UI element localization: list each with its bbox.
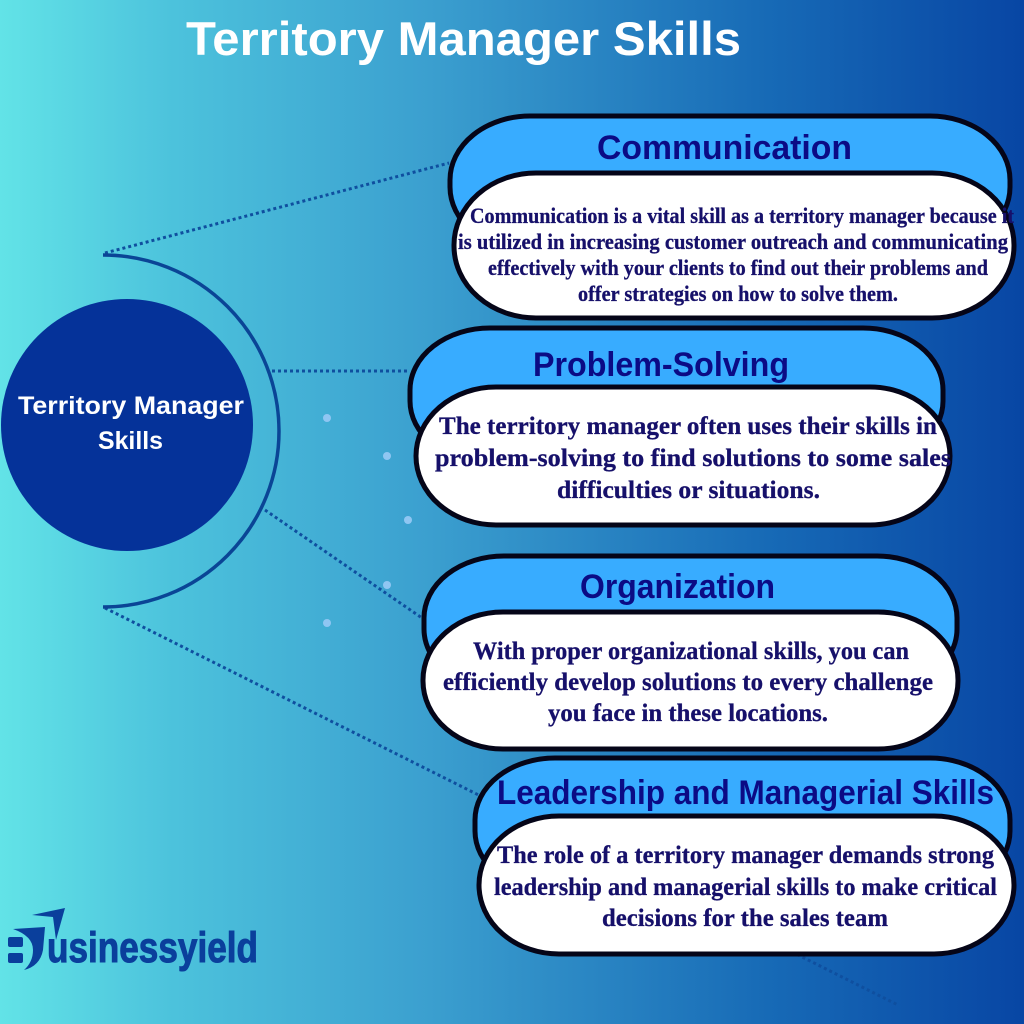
decorative arc around central circle (103, 255, 279, 607)
panel: Problem-Solving: problem-solving to find solutions to some sales (435, 445, 951, 472)
panel: Communication: Communication (597, 129, 852, 167)
panel: Leadership and Managerial Skills: decisions for the sales team (602, 905, 888, 932)
panel: Communication (450, 116, 1015, 318)
panel: Organization: With proper organizational skills, you can (473, 638, 909, 665)
panel: Problem-Solving: Problem-Solving (533, 346, 789, 384)
logo: Businessyield: usinessyield (47, 924, 258, 972)
panel: Leadership and Managerial Skills: leadership and managerial skills to make critical (494, 874, 997, 901)
panel: Organization: you face in these locations. (548, 700, 828, 727)
panel: Organization: Organization (580, 568, 775, 606)
logo: Businessyield (8, 908, 258, 972)
title: Territory Manager Skills (186, 12, 741, 65)
panel: Leadership and Managerial Skills: Leadership and Managerial Skills (497, 774, 994, 812)
central circle: Skills (98, 427, 163, 455)
panel: Communication: effectively with your clients to find out their problems and (488, 255, 988, 280)
dotted connector lines (105, 163, 898, 1005)
panel: Organization: efficiently develop solutions to every challenge (443, 669, 933, 696)
panel: Problem-Solving (410, 328, 951, 525)
panel: Problem-Solving: difficulties or situations. (557, 477, 820, 504)
panel: Problem-Solving: The territory manager often uses their skills in (439, 413, 937, 440)
central circle (1, 299, 253, 551)
decorative dots (323, 414, 412, 627)
panel: Leadership and Managerial Skills: The role of a territory manager demands strong (497, 842, 994, 869)
central circle: Territory Manager (18, 392, 244, 420)
panel: Communication: offer strategies on how to solve them. (578, 281, 898, 306)
panel: Leadership and Managerial Skills (475, 758, 1014, 954)
panel: Organization (423, 556, 958, 749)
